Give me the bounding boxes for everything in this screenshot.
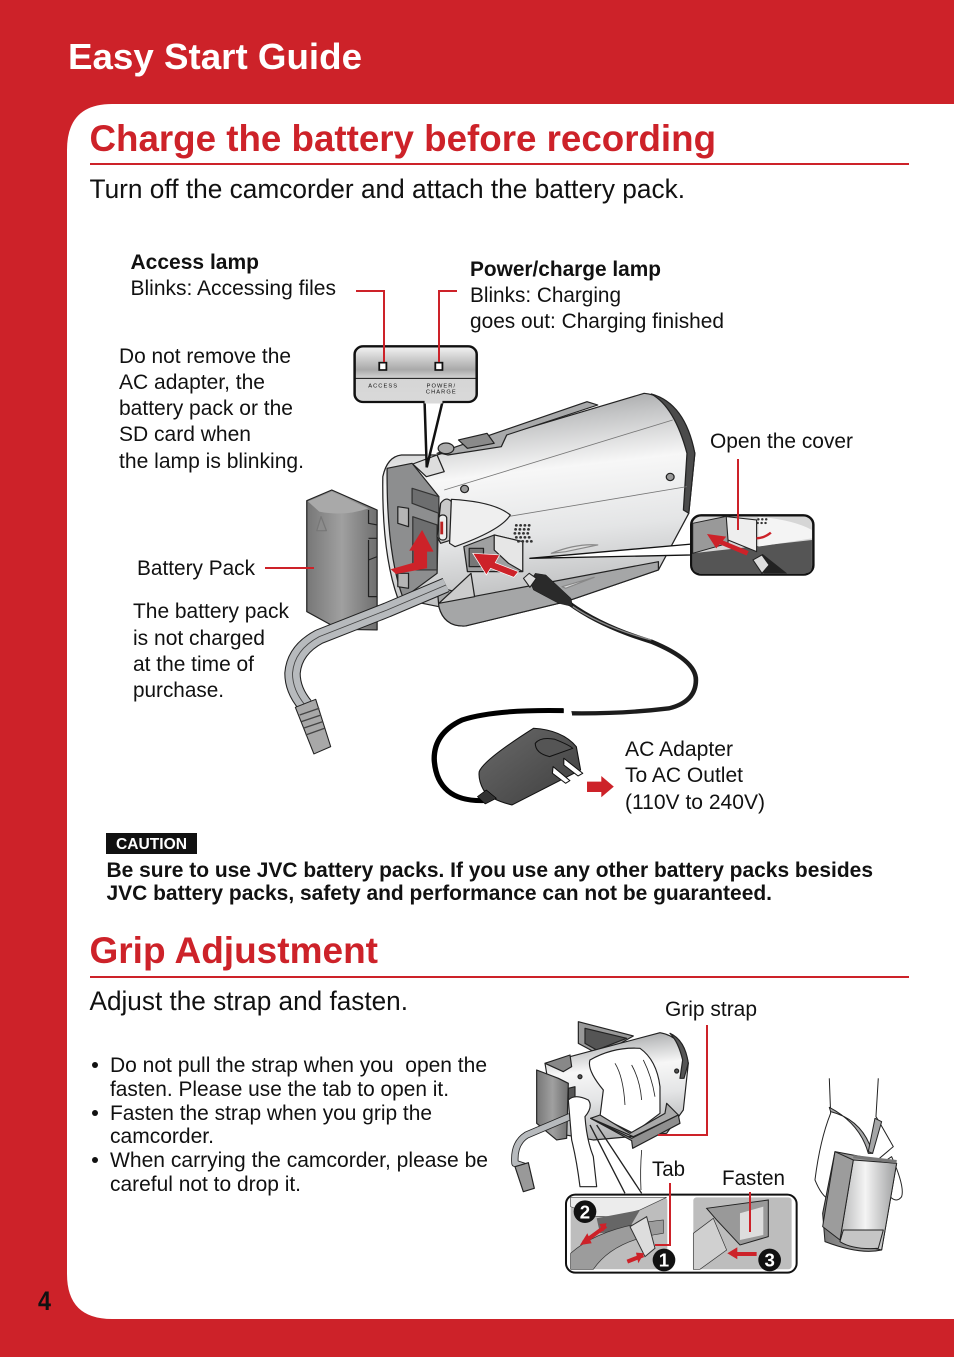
heading: grip adjustment: Grip Adjustment: [90, 929, 378, 971]
intro text: Turn off the camcorder and attach the battery pack.: [90, 174, 685, 204]
step badges: 3: [764, 1250, 775, 1271]
label: open the cover: Open the cover: [710, 428, 853, 453]
label: AC adapter: (110V to 240V): [625, 789, 765, 814]
bullet list: careful not to drop it.: [110, 1171, 301, 1196]
label: tab: Tab: [652, 1156, 685, 1181]
label: power charge lamp: goes out: Charging finished: [470, 308, 724, 333]
bullet list: fasten. Please use the tab to open it.: [110, 1076, 449, 1101]
label: AC adapter: [625, 736, 765, 814]
caution badge: CAUTION: [116, 836, 187, 853]
cover close-up inset: [691, 515, 813, 575]
battery note: purchase.: [133, 677, 224, 702]
caution badge: [106, 833, 197, 854]
caution text: JVC battery packs, safety and performance can not be guaranteed.: [106, 881, 772, 905]
label: access lamp: Blinks: Accessing files: [130, 275, 336, 300]
lamp close-up inset: POWER/: [427, 383, 456, 389]
camcorder illustration: [383, 393, 695, 626]
bullet list: Fasten the strap when you grip the: [110, 1100, 432, 1125]
warning note: battery pack or the: [119, 395, 293, 420]
red leader lines: [265, 291, 738, 568]
page title: Easy Start Guide: [68, 36, 362, 77]
page number: 4: [38, 1286, 51, 1316]
red leader lines: grip: [655, 1025, 750, 1245]
label: access lamp: Access lamp: [130, 249, 259, 274]
step badges: 1: [659, 1250, 669, 1271]
label: fasten: Fasten: [722, 1165, 785, 1190]
label: power charge lamp: Blinks: Charging: [470, 282, 621, 307]
bullet list: [92, 1052, 488, 1196]
step badges: [574, 1200, 781, 1271]
warning note: Do not remove the: [119, 343, 291, 368]
caution text: Be sure to use JVC battery packs. If you use any other battery packs besides: [106, 858, 873, 882]
strap and fasten close-up insets: [566, 1195, 797, 1273]
red insertion arrows: [391, 530, 518, 577]
label: access lamp: [130, 249, 336, 300]
illustration: hand gripping camcorder: [515, 1022, 688, 1193]
arrow to outlet: [587, 776, 614, 797]
bullet list: camcorder.: [110, 1123, 214, 1148]
grip intro text: Adjust the strap and fasten.: [90, 986, 408, 1016]
illustration: carrying camcorder by strap: [815, 1078, 902, 1251]
caution text: [106, 858, 873, 905]
lamp close-up inset: ACCESS: [368, 383, 398, 389]
warning note: [119, 343, 304, 473]
lamp close-up inset: [355, 346, 477, 467]
label: AC adapter: To AC Outlet: [625, 762, 743, 787]
step badges: 2: [580, 1201, 590, 1222]
lamp close-up inset: CHARGE: [426, 389, 457, 395]
warning note: the lamp is blinking.: [119, 448, 304, 473]
warning note: AC adapter, the: [119, 369, 265, 394]
battery note: is not charged: [133, 625, 265, 650]
battery note: at the time of: [133, 651, 255, 676]
label: battery pack: Battery Pack: [137, 555, 255, 580]
label: grip strap: Grip strap: [665, 996, 757, 1021]
warning note: SD card when: [119, 421, 251, 446]
label: power charge lamp: Power/charge lamp: [470, 256, 661, 281]
bullet list: Do not pull the strap when you open the: [110, 1052, 487, 1077]
label: power charge lamp: [470, 256, 724, 333]
bullet list: When carrying the camcorder, please be: [110, 1147, 488, 1172]
AC adapter and cords: [292, 573, 696, 805]
battery note: [133, 598, 289, 702]
label: AC adapter: AC Adapter: [625, 736, 733, 761]
heading: charge the battery: Charge the battery before recording: [90, 117, 716, 159]
battery note: The battery pack: [133, 598, 289, 623]
battery pack illustration: [307, 490, 377, 630]
